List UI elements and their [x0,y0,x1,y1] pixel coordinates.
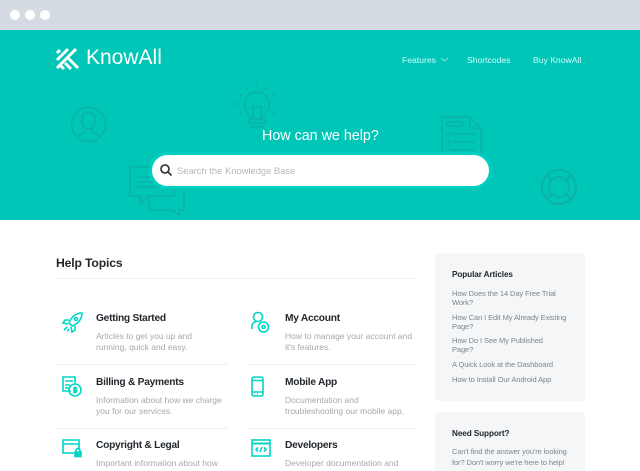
link: A Quick Look at the Dashboard [452,360,553,369]
heading: help topics: Help Topics [56,256,123,270]
description [96,395,222,416]
navigation [402,55,581,65]
description: you for our services. [96,406,173,416]
link: How Can I Edit My Already Existing [452,313,566,322]
link: How to Install Our Android App [452,375,551,384]
background icon: lifebuoy [541,169,577,205]
background icon: speech bubbles [129,166,185,216]
search icon [160,164,172,176]
icon: rocket [62,312,83,334]
description: running, quick and easy. [96,342,188,352]
topic: copyright and legal [62,439,218,468]
background icon: light bulb [235,83,279,128]
background icon: person [70,106,106,142]
article links [452,289,566,384]
topic: developers [251,439,398,468]
title: Developers [285,440,337,451]
description: Articles to get you up and [96,331,192,341]
link: Work? [452,298,473,307]
window dots [10,10,50,20]
description [285,395,404,416]
description: Information about how we charge [96,395,222,405]
icon: browser lock [62,439,82,458]
link: How Do I See My Published [452,336,543,345]
nav: buy: Buy KnowAll [533,55,581,65]
main column: help topics [56,256,418,468]
nav: features: Features [402,55,436,65]
description: Developer documentation and [285,458,398,468]
link [452,289,556,307]
icon: billing [62,376,82,397]
logo [56,46,162,70]
support text [452,447,567,466]
description: Documentation and [285,395,359,405]
nav: chevron [440,58,448,62]
topic: getting started [62,312,192,352]
link: How Does the 14 Day Free Trial [452,289,556,298]
description: Important information about how [96,458,218,468]
hero panel [0,30,640,220]
title: My Account [285,313,340,324]
title: Getting Started [96,313,166,324]
topic: billing and payments [62,376,222,416]
title: Copyright & Legal [96,440,179,451]
icon: account gear [250,312,270,333]
heading: need support: Need Support? [452,429,509,438]
topic: mobile app [251,376,404,416]
search box [152,155,489,186]
logo mark [56,48,79,70]
sidebar panel: need support [435,412,585,471]
description: troubleshooting our mobile app. [285,406,404,416]
link: Page? [452,322,473,331]
title: Mobile App [285,377,337,388]
description [96,331,192,352]
heading: popular articles: Popular Articles [452,270,513,279]
sidebar panel: popular articles [435,253,585,401]
support text: for? Don't worry we're here to help! [452,458,565,466]
browser bar [0,0,640,30]
support text: Can't find the answer you're looking [452,447,567,456]
hero heading: How can we help? [262,128,379,144]
description: it's features. [285,342,331,352]
icon: mobile [251,376,264,397]
link [452,336,543,354]
title: Billing & Payments [96,377,184,388]
topic: my account [250,312,412,352]
description [285,331,412,352]
link [452,313,566,331]
link: Page? [452,345,473,354]
background icon: document [441,116,482,154]
icon: code window [251,439,271,457]
logo wordmark: KnowAll [86,46,162,69]
nav: shortcodes: Shortcodes [467,55,510,65]
search placeholder: Search the Knowledge Base [177,165,295,176]
description: How to manage your account and [285,331,412,341]
